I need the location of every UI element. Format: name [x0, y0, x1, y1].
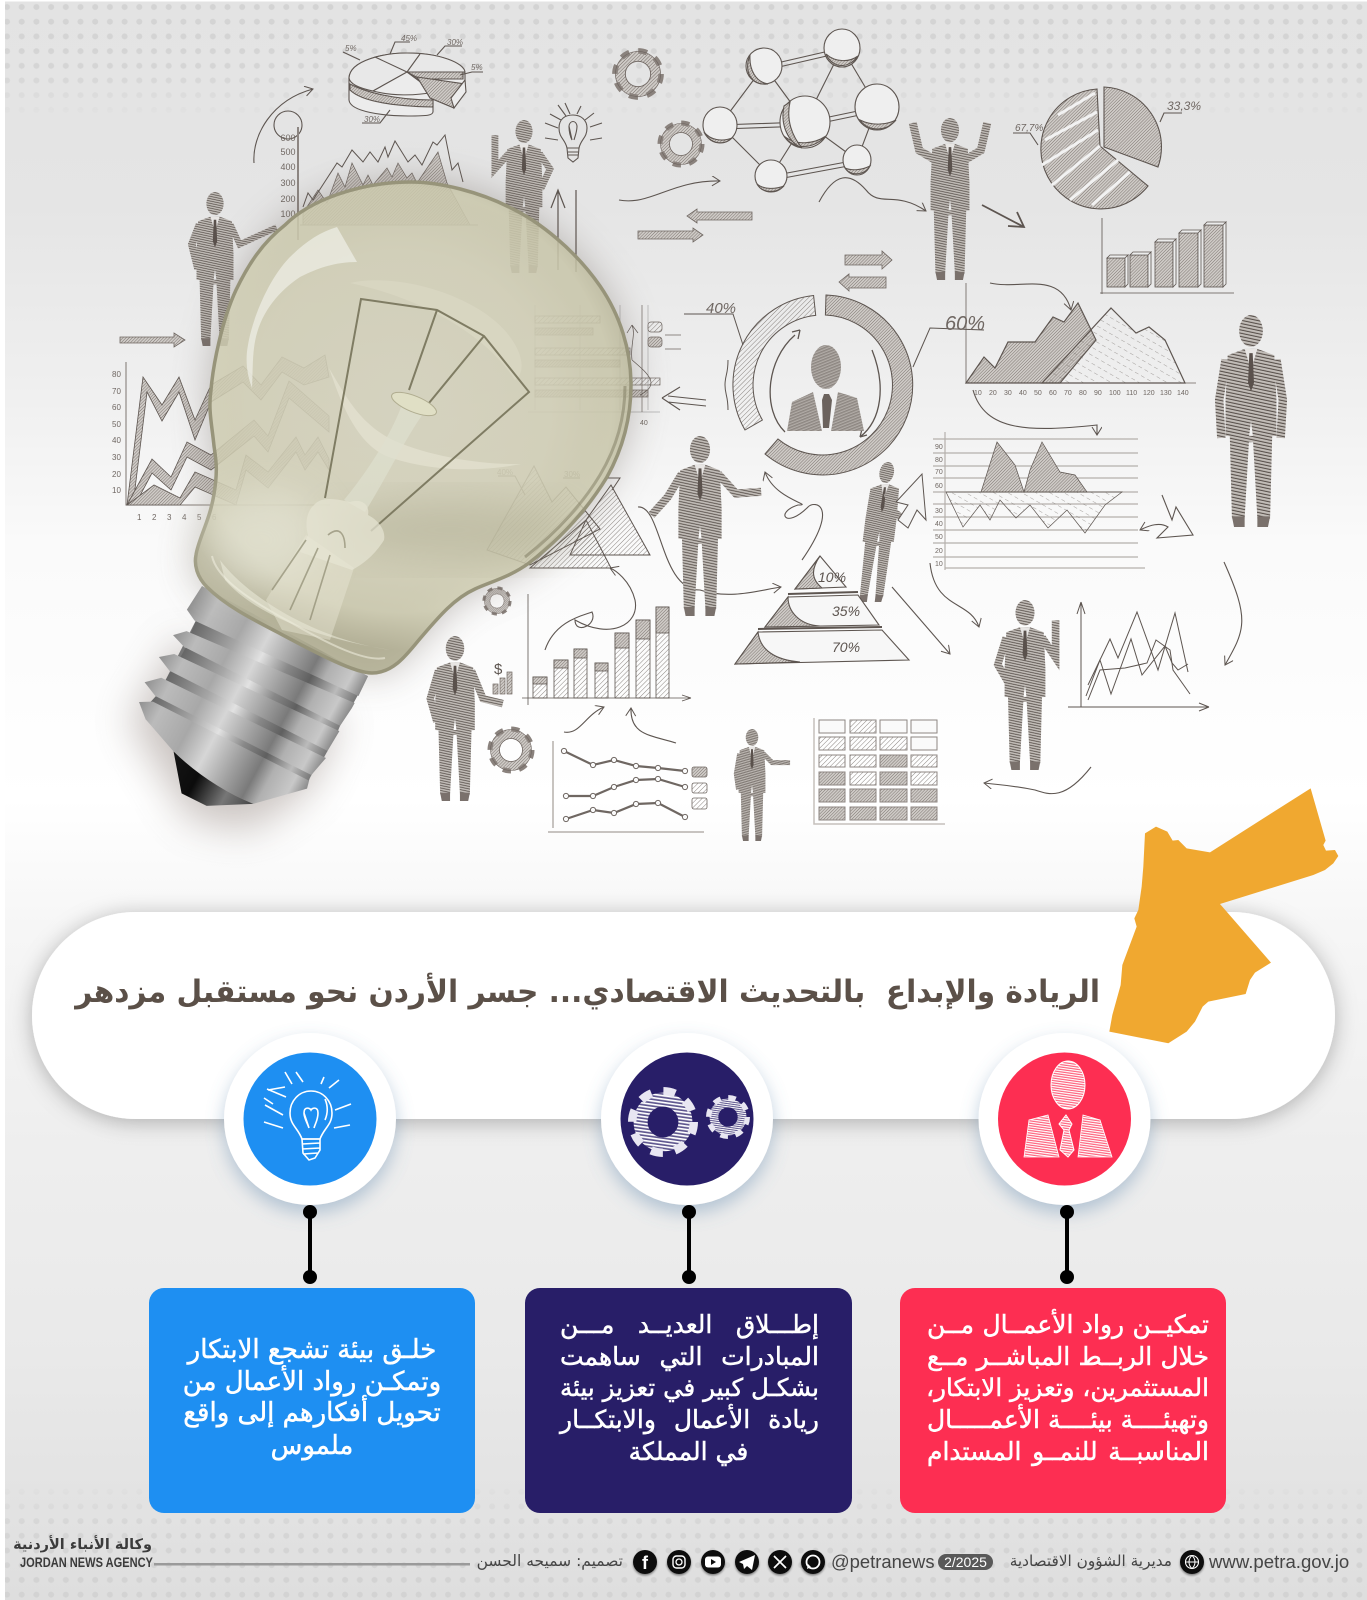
sketch: up and down area chart: 20 [935, 548, 943, 555]
sketch: area chart behind bulb: 600 [280, 133, 296, 143]
sketch: triangle chart [487, 466, 650, 568]
sketch: up and down area chart: 90 [935, 444, 943, 451]
sketch: left zigzag line chart: 30 [112, 453, 121, 462]
panel: initiatives: إطـــلاق العديــد مـــن [560, 1310, 819, 1339]
panel: initiatives [525, 1288, 852, 1513]
sketch: mountain area chart: 40 [1019, 390, 1027, 397]
sketch: left zigzag line chart: 20 [112, 470, 121, 479]
sketch: multi line chart right [1068, 602, 1209, 711]
sketch: gears [484, 51, 702, 771]
panel: initiatives: بشكـل كبير في تعزيز بيئة [560, 1373, 819, 1402]
sketch: left zigzag line chart: 70 [112, 387, 121, 396]
sketch: pyramid chart: 35% [832, 603, 860, 619]
panel: empowering entrepreneurs [900, 1288, 1226, 1513]
sketch: mountain area chart: 30 [1004, 390, 1012, 397]
footer: department: مديرية الشؤون الاقتصادية [1010, 1552, 1172, 1570]
panel: empowering entrepreneurs: المستثمرين، وتعزيز الابتكار، [926, 1373, 1209, 1402]
panel: initiatives: في المملكة [629, 1437, 748, 1466]
sketch: mountain area chart: 120 [1143, 390, 1155, 397]
bulb highlights [247, 227, 357, 388]
sketch: mountain area chart [966, 303, 1189, 397]
panel: innovation environment: وتمكـن رواد الأعمال من [183, 1367, 441, 1397]
icon: facebook [633, 1550, 657, 1574]
sketch: pyramid chart: 70% [832, 639, 860, 655]
panel: initiatives: ريادة الأعمال والابتكــار [560, 1405, 819, 1434]
panel: initiatives: المبادرات التي ساهمت [560, 1342, 819, 1371]
sketch: bar chart bottom [522, 594, 691, 705]
sketch: block arrows [120, 209, 892, 347]
sketch: mountain area chart: 100 [1109, 390, 1121, 397]
icon: X [768, 1550, 792, 1574]
sketch: ring chart [684, 295, 985, 475]
panel: empowering entrepreneurs: تمكيــن رواد الأعمــال مــن [927, 1310, 1209, 1339]
sketch: small dollar chart [493, 661, 512, 694]
sketch: left zigzag line chart: 40 [112, 436, 121, 445]
sketch: area chart behind bulb: 400 [280, 162, 296, 172]
sketch: walking man arrow [896, 474, 926, 528]
sketch: up and down area chart: 80 [935, 457, 943, 464]
sketch: 3D pie chart [343, 34, 483, 124]
sketch: mountain area chart: 140 [1177, 390, 1189, 397]
icon: telegram [735, 1550, 759, 1574]
panel: empowering entrepreneurs: وتهيئــــة بيئــــة الأعمـــــال [927, 1405, 1209, 1434]
sketch: mountain area chart: 110 [1126, 390, 1137, 397]
logo: agency name: وكالة الأنباء الأردنية [13, 1537, 152, 1553]
sketch: doodle lightbulb [545, 103, 602, 162]
sketch: triangle chart: 30% [564, 470, 580, 479]
sketch: area chart behind bulb: 100 [280, 209, 296, 219]
sketch: left zigzag line chart: 2 [152, 513, 157, 522]
sketch: up and down area chart: 40 [935, 521, 943, 528]
sketch: mountain area chart: 50 [1034, 390, 1042, 397]
sketch: up and down area chart [933, 432, 1145, 570]
sketch: mountain area chart: 130 [1160, 390, 1172, 397]
sketch: left zigzag line chart: 80 [112, 370, 121, 379]
Jordan map [1109, 788, 1338, 1043]
sketch: area chart behind bulb: 500 [280, 147, 296, 157]
sketch: ring chart: 40% [706, 300, 736, 317]
sketch: horizontal bars chart: 40 [640, 420, 648, 427]
sketch: left zigzag line chart: 1 [137, 513, 142, 522]
icon: instagram [667, 1550, 691, 1574]
footer: date: 2/2025 [944, 1554, 987, 1570]
white pill header [32, 912, 1335, 1119]
icon: businessman [978, 1033, 1150, 1205]
icon: gears [601, 1033, 773, 1205]
icon: facebook: f [642, 1553, 649, 1573]
sketch: left zigzag line chart: 3 [167, 513, 172, 522]
sketch: mountain area chart: 60 [1049, 390, 1057, 397]
panel: empowering entrepreneurs: خلال الربــط المباشــر مــع [927, 1342, 1209, 1371]
sketch: area chart behind bulb [280, 127, 478, 240]
bulb glass [195, 182, 631, 673]
sketch: pie chart right: 67,7% [1015, 123, 1043, 134]
light bulb [106, 182, 631, 846]
sketch: area chart behind bulb: 200 [280, 194, 296, 204]
logo: agency name: JORDAN NEWS AGENCY [20, 1554, 153, 1570]
sketch: horizontal bars chart [528, 305, 681, 427]
icon: youtube [701, 1550, 725, 1574]
panel: empowering entrepreneurs: المناسبــة للنمــو المستدام [927, 1437, 1209, 1466]
footer: handle: @petranews [831, 1551, 935, 1572]
sketch: pyramid chart [735, 556, 909, 664]
title: الريادة والإبداع بالتحديث الاقتصادي... جسر الأردن نحو مستقبل مزدهر [75, 974, 1100, 1010]
sketch: 3D pie chart: 30% [364, 115, 380, 124]
icon: whatsapp [801, 1550, 825, 1574]
bulb screw base [106, 584, 370, 846]
sketch: left zigzag line chart: 60 [112, 403, 121, 412]
sketch: 3D pie chart: 30% [447, 38, 463, 47]
sketch: pyramid chart: 10% [818, 569, 846, 585]
sketch: men figures [192, 118, 1283, 841]
footer: rule line [154, 1563, 470, 1566]
panel: innovation environment [149, 1288, 475, 1513]
connector: entrepreneurs [1060, 1205, 1074, 1284]
sketch: small dollar chart: $ [494, 661, 503, 678]
sketch: mountain area chart: 20 [989, 390, 997, 397]
sketch: pie chart right: 33,3% [1167, 99, 1201, 113]
sketch: 3D pie chart: 5% [471, 63, 483, 72]
sketch: triangle chart: 40% [497, 468, 513, 477]
panel: innovation environment: تحويل أفكارهم إلى واقع [183, 1398, 441, 1428]
sketch: line chart bottom [548, 741, 707, 832]
sketch: left zigzag line chart: 10 [112, 486, 121, 495]
sketch: 3D pie chart: 5% [345, 44, 357, 53]
sketch: mountain area chart: 70 [1064, 390, 1072, 397]
sketch: up and down area chart: 10 [935, 561, 943, 568]
icon: globe [1180, 1550, 1204, 1574]
sketch: up arrows [551, 190, 576, 272]
footer: website: www.petra.gov.jo [1209, 1551, 1349, 1572]
sketch: table chart [814, 718, 945, 824]
footer: designer credit: تصميم: سميحه الحسن [477, 1552, 623, 1570]
sketch: area chart behind bulb: 300 [280, 178, 296, 188]
sketch: left zigzag line chart: 50 [112, 420, 121, 429]
sketch: left zigzag line chart: 5 [197, 513, 202, 522]
bulb stem [266, 388, 439, 640]
sketch: 3D pie chart: 45% [401, 34, 417, 43]
connector: initiatives [682, 1205, 696, 1284]
sketch: up and down area chart: 70 [935, 469, 943, 476]
sketch: left zigzag line chart [112, 355, 330, 522]
sketch: network diagram [703, 29, 899, 192]
sketch: left zigzag line chart: 4 [182, 513, 187, 522]
sketch: curved arrows [254, 89, 1242, 794]
connector: innovation [303, 1205, 317, 1284]
sketch: mountain area chart: 90 [1094, 390, 1102, 397]
bulb shadow [130, 182, 631, 830]
bulb filament [325, 299, 529, 531]
sketch: up and down area chart: 60 [935, 483, 943, 490]
panel: innovation environment: خلـق بيئة تشجع الابتكار [188, 1335, 436, 1365]
sketch: mountain area chart: 80 [1079, 390, 1087, 397]
badge: date background [938, 1554, 993, 1570]
sketch: 3D bars chart [1100, 218, 1234, 294]
panel: innovation environment: ملموس [271, 1431, 353, 1461]
logo: agency name [13, 1535, 153, 1570]
sketch: up and down area chart: 30 [935, 508, 943, 515]
icon: idea bulb [224, 1033, 396, 1205]
sketch: left zigzag line chart: 6 [212, 513, 217, 522]
sketch: mountain area chart: 10 [974, 390, 982, 397]
sketch: ring chart: 60% [945, 313, 985, 335]
sketch: pie chart right [1013, 87, 1201, 209]
sketch: up and down area chart: 50 [935, 534, 943, 541]
